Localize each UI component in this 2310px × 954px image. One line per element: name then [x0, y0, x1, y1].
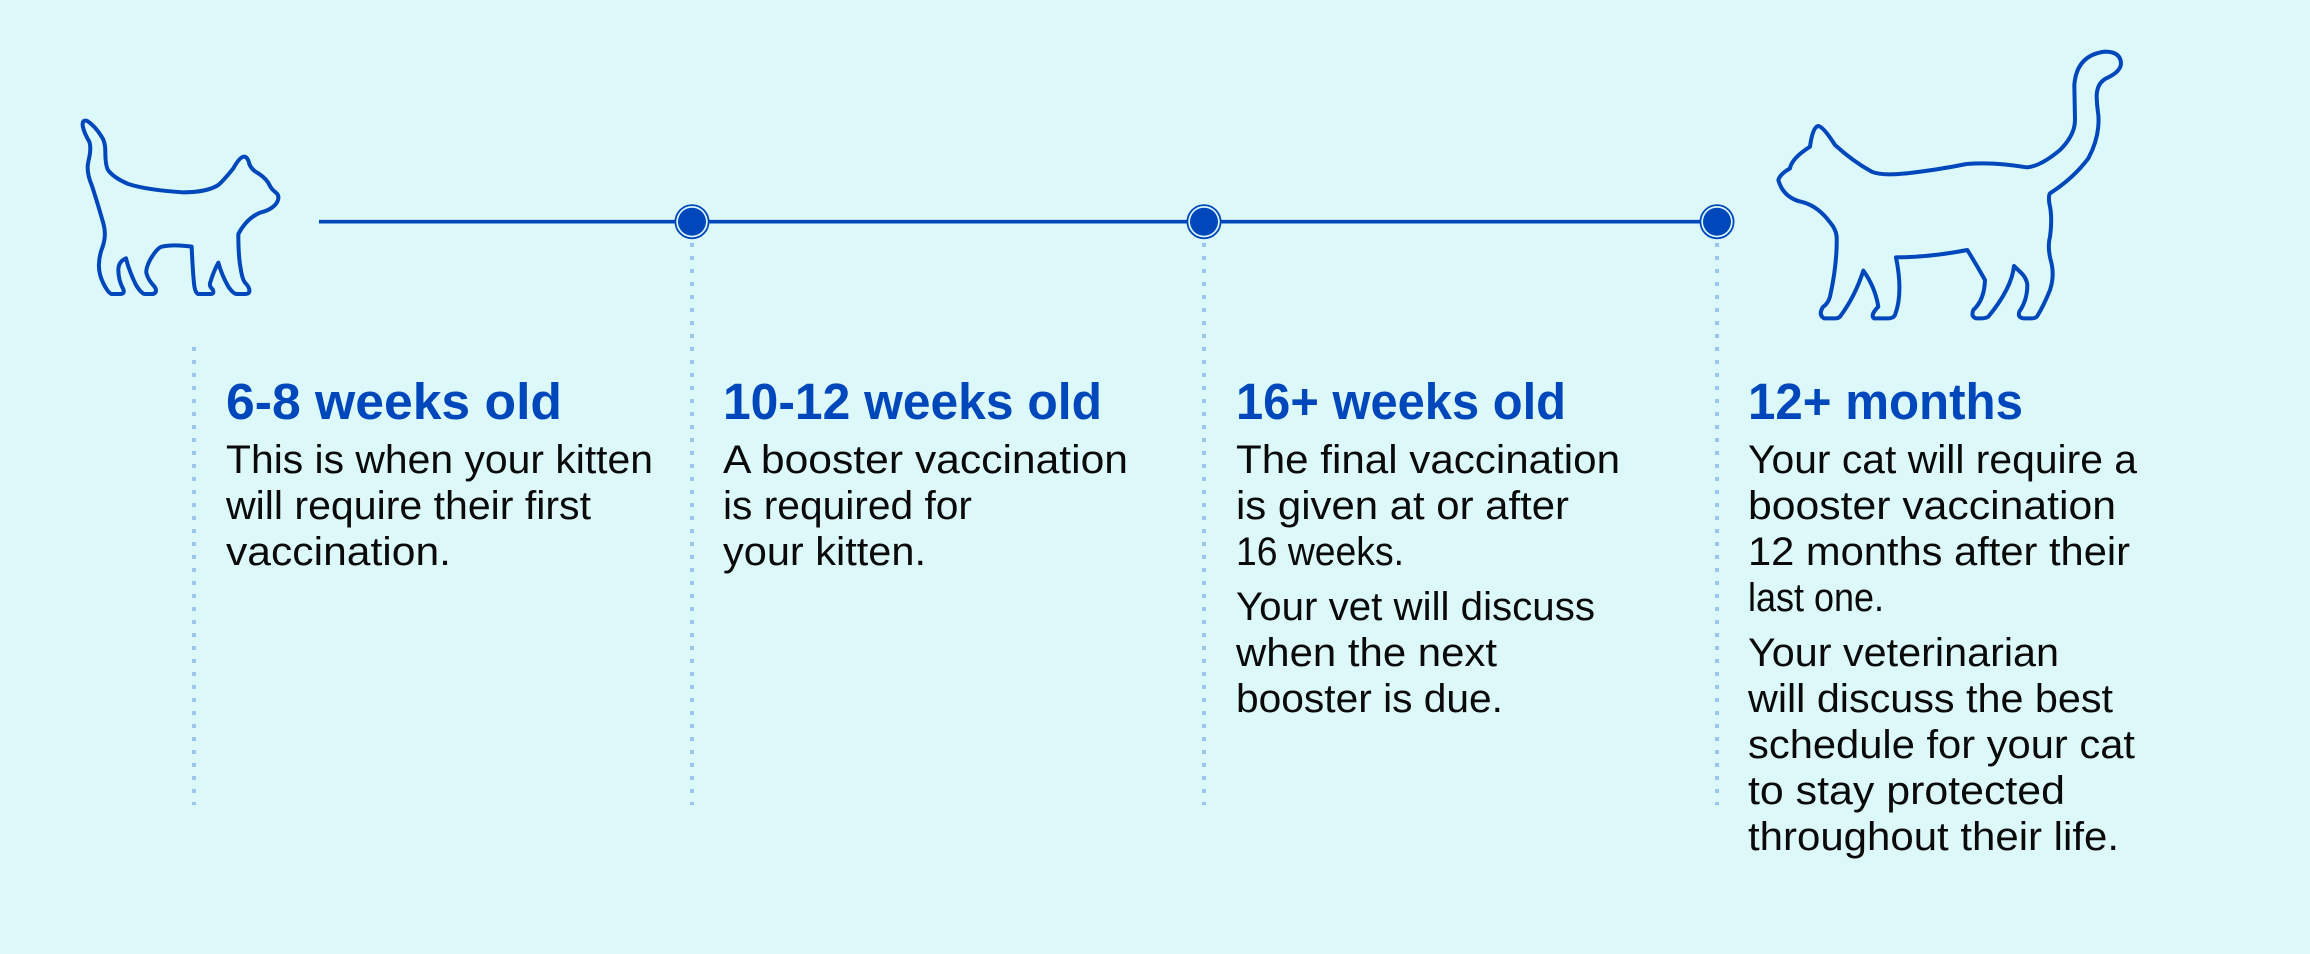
timeline marker: 10-12 weeks — [675, 205, 709, 238]
icon: kitten outline — [83, 121, 278, 294]
dotted drop line: 6-8 weeks — [192, 347, 196, 805]
panel: 12+ months — [1747, 373, 2138, 859]
panel: 6-8 weeks old — [225, 373, 653, 574]
text block: first vaccination: vaccination. — [226, 530, 451, 574]
dotted drop line: 12+ months — [1715, 243, 1719, 805]
text block: annual booster: booster vaccination — [1748, 484, 2116, 528]
panel: 10-12 weeks old — [723, 373, 1128, 574]
text block: booster — [723, 438, 1128, 574]
heading: 12+ months: 12+ months — [1748, 373, 2023, 430]
text block: veterinarian schedule: will discuss the best — [1747, 677, 2113, 721]
text block: next booster: when the next — [1235, 631, 1497, 675]
text block: veterinarian schedule — [1747, 631, 2135, 859]
text block: veterinarian schedule: Your veterinarian — [1748, 631, 2059, 675]
heading: 16+ weeks old: 16+ weeks old — [1236, 373, 1566, 430]
text block: first vaccination — [225, 438, 653, 574]
timeline marker: 12+ months — [1700, 205, 1734, 238]
heading: 10-12 weeks old: 10-12 weeks old — [723, 373, 1102, 430]
text block: first vaccination: This is when your kitten — [226, 438, 653, 482]
text block: annual booster: Your cat will require a — [1748, 438, 2138, 482]
text block: annual booster: 12 months after their — [1748, 530, 2130, 574]
text block: final vaccination: The final vaccination — [1236, 438, 1620, 482]
dotted drop line: 10-12 weeks — [690, 243, 694, 805]
text block: booster: your kitten. — [723, 530, 926, 574]
text block: booster: is required for — [723, 484, 972, 528]
text block: final vaccination: is given at or after — [1236, 484, 1569, 528]
text block: veterinarian schedule: to stay protected — [1748, 769, 2065, 813]
text block: final vaccination — [1236, 438, 1620, 574]
text block: veterinarian schedule: throughout their life. — [1748, 815, 2119, 859]
text block: veterinarian schedule: schedule for your cat — [1748, 723, 2135, 767]
panel: 16+ weeks old — [1235, 373, 1620, 721]
timeline marker: 16+ weeks — [1187, 205, 1221, 238]
text block: next booster: booster is due. — [1236, 677, 1503, 721]
text block: next booster — [1235, 585, 1595, 721]
text block: annual booster — [1748, 438, 2138, 620]
heading: 6-8 weeks old: 6-8 weeks old — [226, 373, 562, 430]
text block: next booster: Your vet will discuss — [1236, 585, 1595, 629]
text block: booster: A booster vaccination — [723, 438, 1128, 482]
dotted drop line: 16+ weeks — [1202, 243, 1206, 805]
text block: final vaccination: 16 weeks. — [1236, 530, 1404, 574]
text block: annual booster: last one. — [1748, 576, 1884, 620]
text block: first vaccination: will require their first — [225, 484, 591, 528]
timeline line — [319, 220, 1717, 223]
icon: adult cat outline — [1778, 52, 2121, 318]
